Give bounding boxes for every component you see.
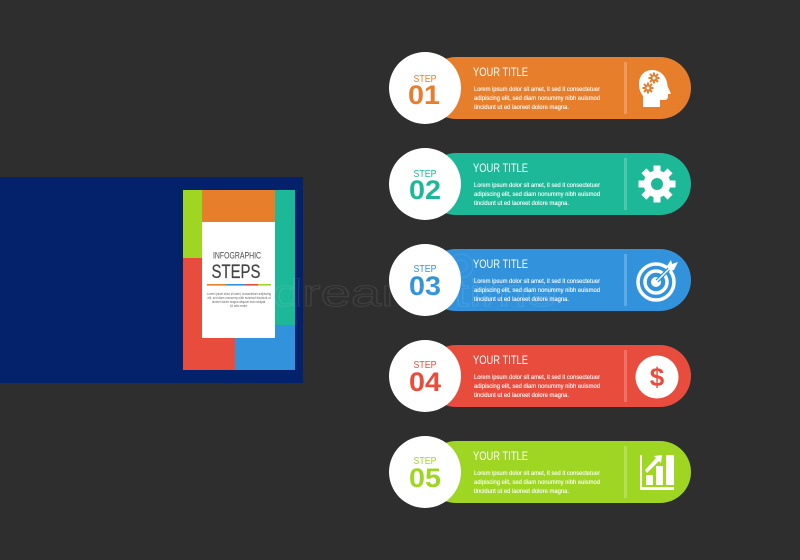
text block 03: Lorem ipsum dolor sit amet, it sed it consectetuer: [474, 278, 601, 285]
icon: target with arrow: [638, 260, 678, 300]
text block 02: [473, 161, 601, 207]
step label 04: STEP: [414, 359, 436, 371]
cover body text: laoreet dolore magna aliquam erat volutpat.: [212, 300, 266, 304]
cover heading: INFOGRAPHIC: [213, 250, 261, 260]
step label 02: STEP: [414, 168, 436, 180]
panel: navy cover block: [0, 177, 303, 383]
icon: dollar coin: $: [650, 362, 665, 392]
step label 05: STEP: [414, 455, 436, 467]
watermark: dreamstime: [272, 273, 557, 315]
text block 04: YOUR TITLE: [473, 353, 528, 367]
text block 05: tincidunt ut ed laoreet dolore magna.: [474, 488, 569, 495]
panel: step 02: [389, 148, 691, 220]
panel: step 01: [389, 52, 691, 124]
text block 05: YOUR TITLE: [473, 449, 528, 463]
icon: bar chart with arrow: [640, 455, 674, 490]
text block 03: tincidunt ut ed laoreet dolore magna.: [474, 296, 569, 303]
text block 05: [473, 449, 601, 495]
text block 05: Lorem ipsum dolor sit amet, it sed it consectetuer: [474, 470, 601, 477]
step label 05: 05: [409, 463, 441, 493]
step label 01: 01: [408, 80, 440, 110]
text block 04: tincidunt ut ed laoreet dolore magna.: [474, 392, 569, 399]
text block 04: Lorem ipsum dolor sit amet, it sed it consectetuer: [474, 374, 601, 381]
panel: cover card: [183, 190, 295, 370]
step label 03: STEP: [414, 263, 436, 275]
cover rainbow divider: [207, 284, 271, 286]
panel: step 04: [389, 340, 691, 412]
cover heading: [212, 250, 261, 283]
cover heading: STEPS: [212, 262, 260, 283]
step label 02: 02: [409, 175, 441, 205]
text block 01: tincidunt ut ed laoreet dolore magna.: [474, 104, 569, 111]
text block 02: YOUR TITLE: [473, 161, 528, 175]
text block 01: adipiscing elit, sed diam nonummy nibh euismod: [474, 95, 600, 102]
cover body text: Ut wisi enim.: [230, 304, 248, 308]
text block 05: adipiscing elit, sed diam nonummy nibh euismod: [474, 479, 600, 486]
text block 01: [473, 65, 601, 111]
text block 04: adipiscing elit, sed diam nonummy nibh euismod: [474, 383, 600, 390]
icon: gear: [638, 166, 676, 202]
cover body text: [207, 292, 271, 308]
icon: dollar coin: [636, 356, 678, 398]
text block 03: YOUR TITLE: [473, 257, 528, 271]
text block 03: [473, 257, 601, 303]
panel: step 05: [389, 436, 691, 508]
cover body text: elit, sed diam nonummy nibh euismod tincidunt ut: [208, 296, 271, 300]
panel: step 03: [389, 244, 691, 316]
step label 04: 04: [409, 367, 441, 397]
text block 01: Lorem ipsum dolor sit amet, it sed it consectetuer: [474, 86, 601, 93]
text block 03: adipiscing elit, sed diam nonummy nibh euismod: [474, 287, 600, 294]
text block 02: tincidunt ut ed laoreet dolore magna.: [474, 200, 569, 207]
text block 02: adipiscing elit, sed diam nonummy nibh euismod: [474, 191, 600, 198]
text block 02: Lorem ipsum dolor sit amet, it sed it consectetuer: [474, 182, 601, 189]
text block 04: [473, 353, 601, 399]
text block 01: YOUR TITLE: [473, 65, 528, 79]
step label 01: STEP: [414, 73, 436, 85]
watermark: [272, 254, 557, 315]
icon: head with gears: [639, 70, 671, 107]
step label 03: 03: [409, 271, 441, 301]
cover body text: Lorem ipsum dolor sit amet, consectetuer adipiscing: [207, 292, 271, 296]
